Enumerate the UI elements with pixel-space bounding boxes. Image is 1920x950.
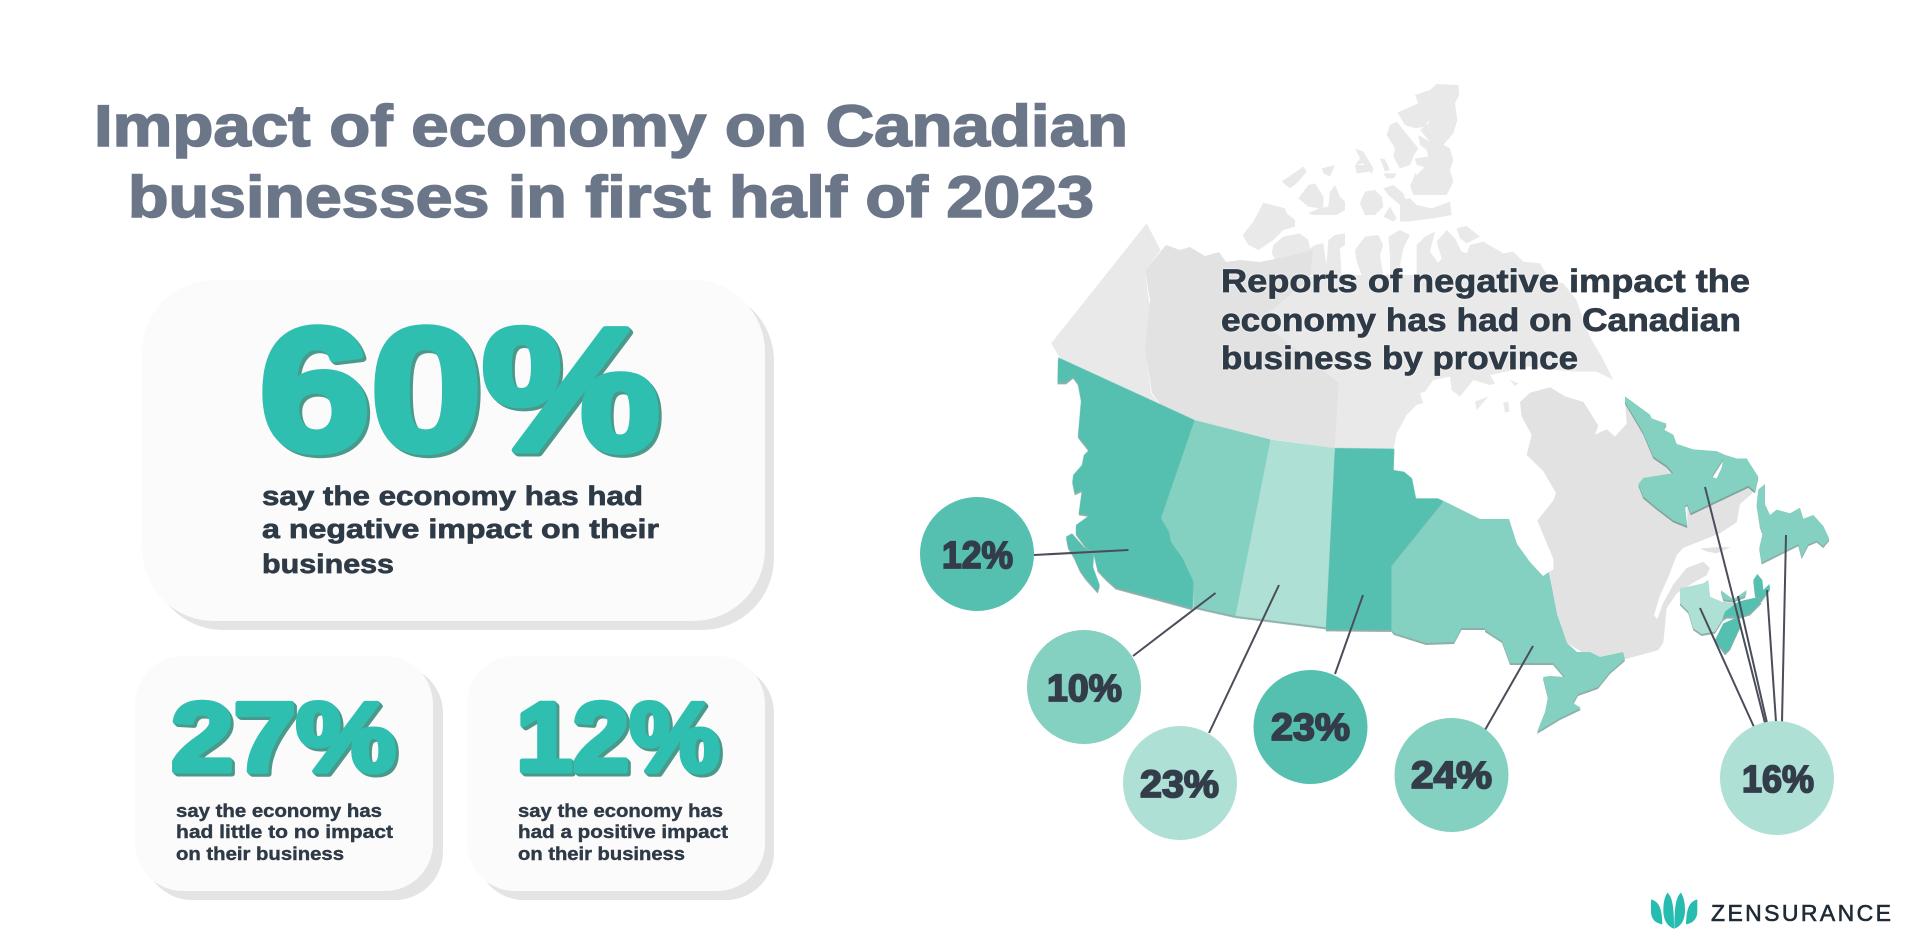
callout: Ontario 24%: 24%: [1411, 755, 1492, 797]
description: 27%: on their business: [176, 844, 344, 864]
callout: Manitoba 23%: [1254, 670, 1368, 784]
callout: Atlantic 16%: 16%: [1742, 759, 1814, 801]
stat: 12%: 12%: [516, 682, 720, 792]
callout: Saskatchewan 23%: [1123, 726, 1237, 840]
logo: Zensurance: [1651, 893, 1891, 929]
panel: 12% positive impact: [467, 656, 774, 900]
stat: 60%: 60%: [259, 293, 660, 488]
ontario: [1392, 501, 1625, 732]
british columbia: [1057, 357, 1195, 608]
northwest territories: [1145, 245, 1339, 448]
wordmark: ZENSURANCE: [1711, 900, 1891, 926]
callout: Manitoba 23%: 23%: [1271, 707, 1350, 749]
icon: lotus: [1651, 893, 1697, 929]
map heading: [1221, 263, 1750, 376]
callout: Atlantic 16%: [1720, 721, 1834, 835]
description: 12%: had a positive impact: [518, 822, 728, 842]
title: [94, 94, 1128, 230]
saskatchewan: [1235, 439, 1335, 627]
map heading: Reports of negative impact the: [1221, 263, 1750, 299]
panel: 60% negative impact: [142, 280, 774, 630]
northern territories and arctic islands: [1051, 84, 1613, 450]
newfoundland: [1757, 484, 1829, 562]
description: 12%: say the economy has: [518, 801, 723, 821]
description: 60%: [262, 481, 660, 579]
quebec: [1520, 387, 1757, 659]
stat: 27%: 27%: [171, 682, 396, 792]
map heading: economy has had on Canadian: [1221, 302, 1741, 338]
manitoba: [1326, 448, 1444, 630]
panel: 27% little to no impact: [135, 656, 443, 900]
leader lines: [1034, 487, 1786, 733]
callout: Alberta 10%: 10%: [1047, 668, 1122, 710]
new brunswick: [1680, 580, 1735, 634]
nova scotia: [1715, 574, 1770, 653]
labrador: [1625, 396, 1758, 526]
description: 12%: on their business: [518, 844, 685, 864]
description: 60%: a negative impact on their: [262, 514, 660, 544]
alberta: [1161, 420, 1270, 616]
callout: British Columbia 12%: 12%: [942, 535, 1013, 577]
callout: Alberta 10%: [1027, 630, 1141, 744]
callout: British Columbia 12%: [920, 497, 1034, 611]
callout: Ontario 24%: [1394, 718, 1508, 832]
description: 60%: business: [262, 549, 394, 579]
title: businesses in first half of 2023: [128, 165, 1094, 230]
map heading: business by province: [1221, 340, 1578, 376]
map of Canada: [1051, 84, 1829, 732]
description: 12%: [518, 801, 728, 864]
description: 27%: say the economy has: [176, 801, 382, 821]
title: Impact of economy on Canadian: [94, 94, 1128, 159]
prince edward island: [1721, 590, 1747, 601]
description: 27%: [176, 801, 393, 864]
yukon: [1051, 223, 1162, 408]
description: 27%: had little to no impact: [176, 822, 393, 842]
provinces coloured by percentage: [1057, 357, 1829, 732]
callout: Saskatchewan 23%: 23%: [1140, 764, 1219, 806]
description: 60%: say the economy has had: [262, 481, 643, 511]
